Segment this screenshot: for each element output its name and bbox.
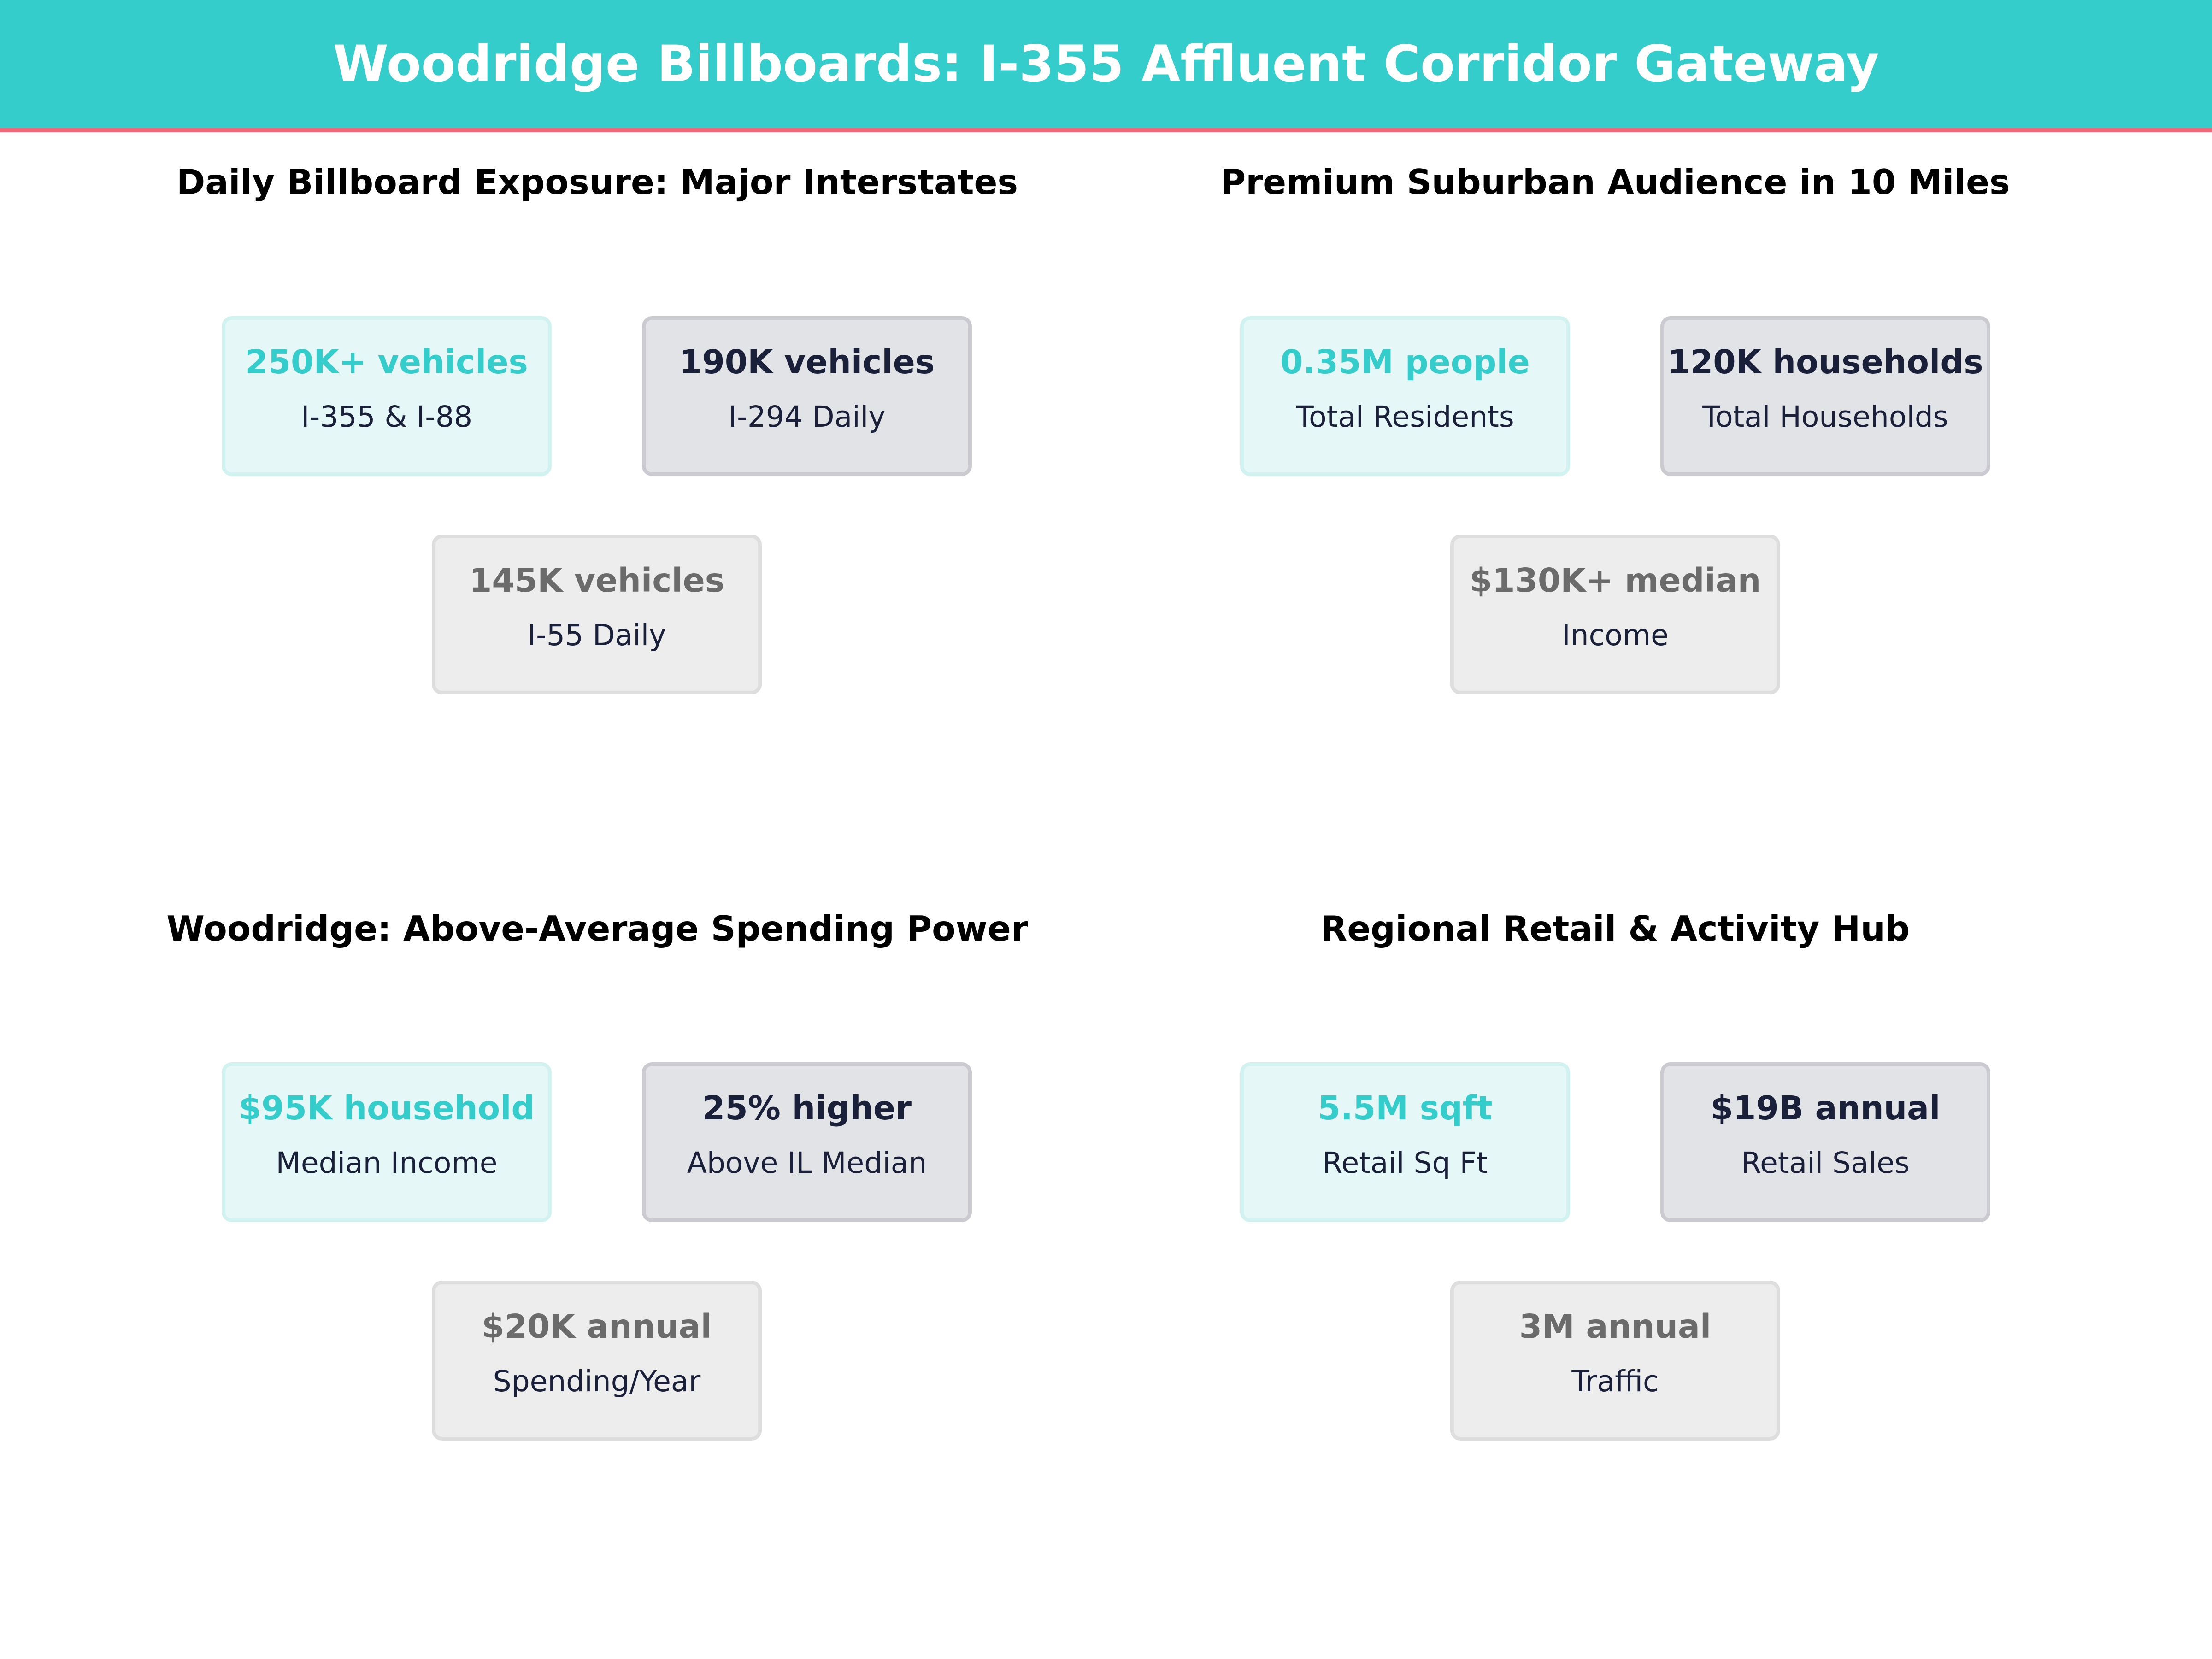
card: $130K+ median: Income xyxy=(1562,618,1669,652)
card: $19B annual xyxy=(1660,1062,1990,1222)
card: 5.5M sqft: 5.5M sqft xyxy=(1318,1089,1493,1127)
card: 250K+ vehicles: 250K+ vehicles xyxy=(245,343,528,381)
card: 25% higher: Above IL Median xyxy=(687,1146,927,1180)
card: 120K households xyxy=(1660,316,1990,476)
card: 145K vehicles: 145K vehicles xyxy=(469,561,724,600)
card: $20K annual: $20K annual xyxy=(482,1307,712,1346)
heading: retail hub: Regional Retail & Activity Hub xyxy=(1321,908,1910,949)
header banner xyxy=(0,0,2212,132)
card: 5.5M sqft: Retail Sq Ft xyxy=(1323,1146,1488,1180)
card: 120K households: 120K households xyxy=(1667,343,1983,381)
card: $130K+ median xyxy=(1450,535,1780,694)
card: 25% higher: 25% higher xyxy=(702,1089,912,1127)
card: 0.35M people xyxy=(1240,316,1570,476)
card: $19B annual: $19B annual xyxy=(1711,1089,1940,1127)
card: $95K household: Median Income xyxy=(276,1146,498,1180)
card: 250K+ vehicles: I-355 & I-88 xyxy=(301,400,472,434)
card: 5.5M sqft xyxy=(1240,1062,1570,1222)
card: 25% higher xyxy=(642,1062,972,1222)
card: 0.35M people: 0.35M people xyxy=(1280,343,1530,381)
card: 145K vehicles xyxy=(432,535,762,694)
card: $95K household: $95K household xyxy=(239,1089,535,1127)
card: $95K household xyxy=(222,1062,552,1222)
heading: premium audience: Premium Suburban Audience in 10 Miles xyxy=(1220,162,2010,202)
card: $20K annual xyxy=(432,1281,762,1441)
card: 190K vehicles: I-294 Daily xyxy=(728,400,886,434)
card: 3M annual xyxy=(1450,1281,1780,1441)
card: $20K annual: Spending/Year xyxy=(493,1365,700,1398)
card: $19B annual: Retail Sales xyxy=(1741,1146,1910,1180)
card: 250K+ vehicles xyxy=(222,316,552,476)
card: $130K+ median: $130K+ median xyxy=(1470,561,1761,600)
card: 190K vehicles xyxy=(642,316,972,476)
card: 145K vehicles: I-55 Daily xyxy=(528,618,666,652)
card: 120K households: Total Households xyxy=(1702,400,1948,434)
heading: spending power: Woodridge: Above-Average Spending Power xyxy=(166,908,1028,949)
card: 0.35M people: Total Residents xyxy=(1296,400,1514,434)
card: 3M annual: 3M annual xyxy=(1519,1307,1711,1346)
heading: daily exposure: Daily Billboard Exposure: Major Interstates xyxy=(176,162,1018,202)
card: 190K vehicles: 190K vehicles xyxy=(679,343,935,381)
title: Woodridge Billboards: I-355 Affluent Corridor Gateway xyxy=(333,35,1879,93)
card: 3M annual: Traffic xyxy=(1571,1365,1659,1398)
